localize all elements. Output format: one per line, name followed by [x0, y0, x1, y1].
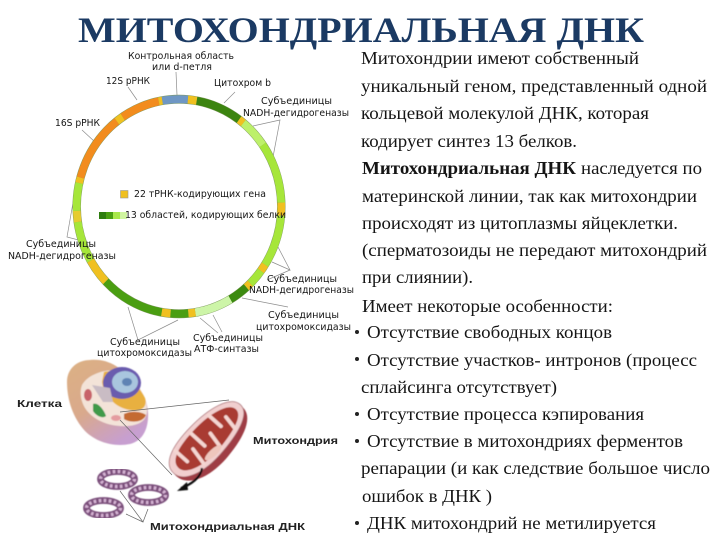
gene labels: 16S рРНК: [55, 118, 100, 129]
text block: description: Митохондриальная ДНК: [362, 158, 576, 178]
gene labels: NADH-дегидрогеназы: [8, 251, 116, 262]
gene labels: или d-петля: [152, 62, 212, 73]
gene labels: Субъединицы: [268, 310, 339, 321]
gene labels: Субъединицы: [26, 239, 96, 250]
text block: features list: [355, 296, 710, 533]
legend: 13 областей, кодирующих белки: [125, 210, 286, 221]
text block: features list: ошибок в ДНК ): [362, 486, 492, 506]
icon: cell: [67, 360, 148, 445]
gene labels: Контрольная область: [128, 51, 234, 62]
text block: description: материнской линии, так как митохондрии: [362, 186, 697, 206]
illustration labels: Митохондриальная ДНК: [150, 521, 306, 533]
text block: description: [361, 48, 707, 287]
text block: features list: Отсутствие свободных концов: [367, 322, 612, 342]
title: МИТОХОНДРИАЛЬНАЯ ДНК: [78, 10, 644, 50]
illustration labels: [17, 398, 338, 533]
text block: features list: Отсутствие участков- интронов (процесс: [367, 350, 697, 370]
text block: description: происходят из цитоплазмы яйцеклетки.: [362, 213, 678, 233]
text block: description: Митохондрии имеют собственный: [361, 48, 639, 68]
gene labels: Субъединицы: [261, 96, 332, 107]
text block: description: кодирует синтез 13 белков.: [361, 131, 577, 151]
gene labels: Субъединицы: [110, 337, 180, 348]
legend: 22 тРНК-кодирующих гена: [134, 189, 266, 200]
gene labels: NADH-дегидрогеназы: [243, 108, 349, 119]
icon: mitochondrial DNA rings: [86, 472, 166, 516]
text block: description: при слиянии).: [362, 267, 473, 287]
text block: features list: Отсутствие в митохондриях ферментов: [367, 431, 683, 451]
zoom lines from cell to mitochondrion: [120, 400, 229, 475]
text block: features list: ДНК митохондрий не метилируется: [367, 513, 656, 533]
illustration labels: Митохондрия: [253, 435, 338, 447]
gene labels: NADH-дегидрогеназы: [249, 285, 354, 296]
text block: features list: Отсутствие процесса кэпирования: [367, 404, 644, 424]
gene labels: АТФ-синтазы: [194, 344, 259, 355]
text block: description: уникальный геном, представленный одной: [361, 76, 707, 96]
illustration: cell, mitochondrion and DNA: [17, 360, 338, 533]
gene labels: цитохромоксидазы: [97, 348, 192, 359]
text block: description: (сперматозоиды не передают митохондрий: [362, 240, 707, 260]
text block: description: наследуется по: [581, 158, 702, 178]
gene labels: 12S рРНК: [106, 76, 150, 87]
gene labels: Цитохром b: [214, 78, 271, 89]
text block: features list: Имеет некоторые особенности:: [362, 296, 613, 316]
legend: [99, 189, 286, 221]
gene labels: [8, 51, 354, 359]
circular mitochondrial genome diagram: [8, 51, 354, 359]
icon: mitochondrion: [158, 392, 261, 492]
gene labels: Субъединицы: [267, 274, 337, 285]
text block: features list: репарации (и как следствие большое число: [361, 458, 710, 478]
gene labels: цитохромоксидазы: [256, 322, 351, 333]
genome ring: [77, 99, 281, 314]
text block: features list: сплайсинга отсутствует): [361, 377, 557, 397]
text block: description: кольцевой молекулой ДНК, которая: [361, 103, 649, 123]
illustration labels: Клетка: [17, 398, 62, 410]
gene labels: Субъединицы: [193, 333, 263, 344]
